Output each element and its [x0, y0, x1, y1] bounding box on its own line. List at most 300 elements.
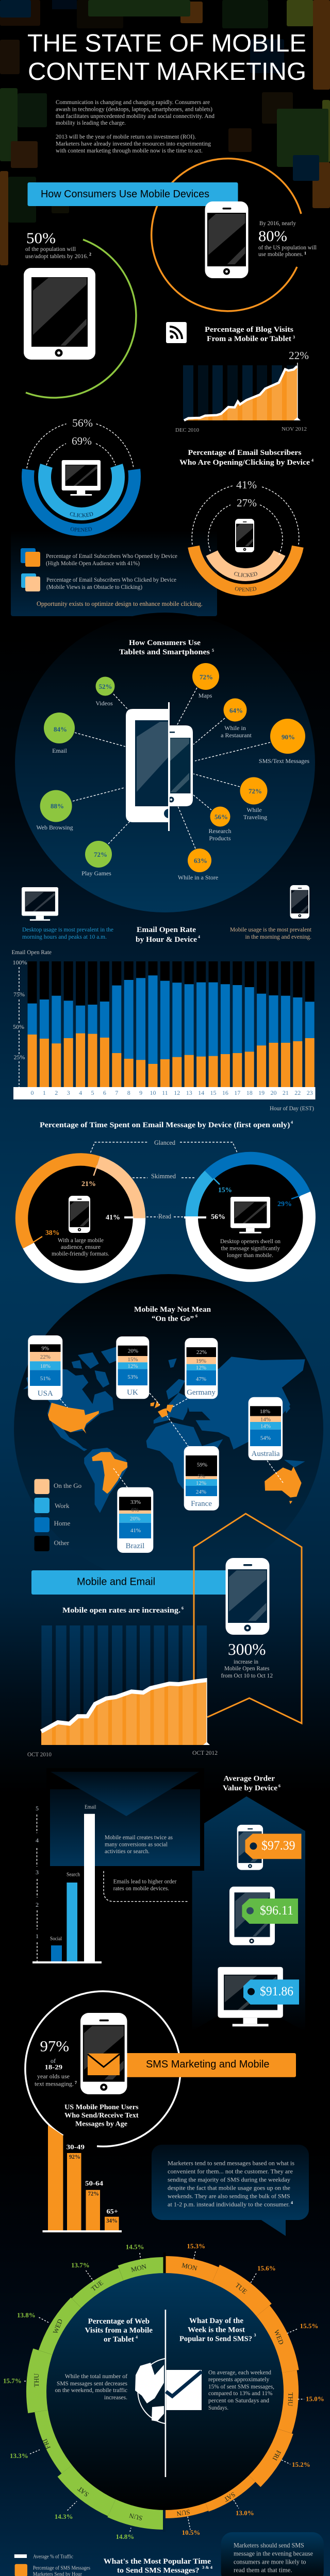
heading: email subscribers: Percentage of Email Subscribers [188, 449, 302, 457]
donut: desktop time spent: 56% [211, 1213, 225, 1221]
area chart: blog visits: DEC 2010 [175, 427, 199, 433]
heading: web visits: Percentage of Web [88, 2317, 150, 2326]
callout: send in the evening: message in the evening because [234, 2550, 313, 2557]
bar chart: text messaging by age: 92% [69, 2153, 80, 2160]
stat: 300 percent: 300% [228, 1640, 266, 1658]
phone card: Australia: 54% [260, 1435, 271, 1442]
bubble: sms [259, 719, 309, 765]
bar chart: email open rate by hour: 14 [198, 1089, 204, 1096]
heading: web visits: or Tablet [104, 2335, 134, 2344]
phone card: Germany: 22% [196, 1349, 207, 1355]
monitor price: $91.86 [260, 1985, 293, 1998]
heading: text by age [64, 2104, 139, 2128]
bubble: email [44, 713, 75, 754]
bar chart: conversions: 1 [36, 1933, 39, 1940]
legend panel: (Mobile Views is an Obstacle to Clicking) [46, 583, 142, 590]
donut: desktop time spent: 15% [218, 1187, 232, 1194]
intro text: Marketers have already invested the resources into experimenting [56, 140, 211, 147]
phone card: Australia [249, 1397, 283, 1460]
green percentages [3, 2243, 144, 2540]
decorative top blocks [0, 0, 330, 265]
callout: higher order rates: Emails lead to higher order [113, 1878, 176, 1885]
bar chart: email open rate by hour: 15 [210, 1089, 217, 1096]
bubble: videos: 52% [99, 683, 112, 690]
chart: desktop opened and clicked arcs: CLICKED [70, 512, 93, 517]
title: CONTENT MARKETING [28, 58, 306, 86]
green percentages: 13.3% [10, 2452, 28, 2460]
bar chart: email open rate by hour: 1 [43, 1089, 46, 1096]
intro text: 2013 will be the year of mobile return on investment (ROI). [56, 133, 196, 140]
green percentages: 14.8% [116, 2533, 134, 2540]
intro text: with content marketing through mobile now is the time to act. [56, 147, 203, 154]
stat: 300 percent: increase in [234, 1658, 258, 1665]
callout: speech bubble: convenient for them... not the customer. They are [168, 2167, 293, 2175]
bubble: while traveling: 72% [249, 787, 262, 795]
chart: desktop opened and clicked arcs: OPENED [70, 527, 92, 532]
bar chart: email open rate by hour: 7 [115, 1089, 118, 1096]
day labels: WED [273, 2329, 286, 2346]
map highlight: Ireland [151, 1402, 155, 1406]
panel: envelope: activities or search. [105, 1848, 150, 1855]
heading: email subscribers [179, 449, 314, 467]
map highlight: Tasmania [289, 1501, 292, 1504]
icon: rss [166, 322, 187, 343]
stat: 300 percent: from Oct 10 to Oct 12 [221, 1672, 273, 1679]
heading: blog visits [205, 326, 295, 343]
orange percentages: 15.6% [257, 2264, 276, 2272]
heading: email open rate: by Hour & Device [136, 936, 197, 944]
bar chart: conversions: Search [67, 1872, 80, 1878]
note: desktop usage: Desktop usage is most prevalent in the [22, 926, 113, 933]
heading: on the go: “On the Go” [152, 1315, 194, 1323]
note: mobile usage [230, 926, 312, 940]
donut: mobile time spent [22, 1159, 139, 1277]
note: weekend sms share: 15% of sent SMS messages, [208, 2383, 274, 2390]
phone card: Australia: 14% [260, 1417, 271, 1423]
note: weekend traffic: SMS messages sent decreases [57, 2380, 127, 2387]
phone card: Germany: 12% [196, 1365, 206, 1371]
day labels [32, 2261, 294, 2522]
bar chart: email open rate by hour: Hour of Day (EST) [270, 1105, 314, 1112]
area chart: blog visits [175, 349, 309, 433]
heading: popular time for sms: What's the Most Popular Time [104, 2557, 211, 2566]
day labels: SUN [176, 2508, 191, 2518]
bar chart: email open rate by hour: 50% [13, 1023, 24, 1030]
heading: mobile open rates: Mobile open rates are increasing. [62, 1606, 180, 1615]
note: weekend sms share: Sundays. [208, 2404, 228, 2411]
heading: day for sms: Popular to Send SMS? [179, 2335, 252, 2343]
map legend: On the Go [54, 1482, 81, 1489]
phone card: UK: 12% [127, 1363, 138, 1369]
callout: send in the evening: Marketers should send SMS [234, 2541, 304, 2549]
orange percentages: 15.0% [306, 2395, 324, 2403]
donut connector labels: Read [158, 1212, 171, 1220]
heading: web visits [85, 2317, 153, 2344]
callout: higher order rates: rates on mobile devices. [113, 1885, 169, 1892]
legend panel: Percentage of Email Subscribers Who Clicked by Device [46, 576, 176, 583]
intro text: awash in technology (desktops, laptops, smartphones, and tablets) [56, 105, 212, 112]
panel: average order value [192, 1797, 305, 2031]
heading: email subscribers: Who Are Opening/Clicking by Device [179, 459, 310, 467]
section banner: how consumers use mobile devices: How Consumers Use Mobile Devices [41, 189, 209, 200]
bar chart: conversions: Social [50, 1936, 62, 1942]
heading: tablets and smartphones: How Consumers Use [129, 639, 201, 647]
panel: envelope [46, 1768, 204, 1871]
bar chart: email open rate by hour: Email Open Rate [11, 948, 52, 956]
icon: phone with envelope [80, 2013, 127, 2094]
heading: tablets and smartphones: 5 [212, 648, 214, 653]
bar chart: email open rate by hour: 11 [162, 1089, 168, 1096]
intro text: mobility is leading the charge. [56, 119, 126, 126]
bubble: research products: Products [209, 835, 231, 842]
donut: desktop time spent: Desktop openers dwell on [220, 1238, 280, 1245]
callout: send in the evening: consumers are more likely to [234, 2557, 306, 2566]
note: weekend traffic: While the total number of [65, 2372, 127, 2380]
bubble: while in a restaurant: While in [224, 724, 246, 732]
stat: 80 percent phones: By 2016, nearly [259, 219, 296, 227]
phone card: Brazil: 33% [130, 1499, 141, 1505]
day labels: SAT [76, 2485, 90, 2499]
phone card: USA: 22% [40, 1354, 51, 1360]
bubble: while traveling [240, 777, 267, 821]
day labels: MON [130, 2262, 147, 2274]
bar chart: email open rate by hour: 12 [174, 1089, 180, 1096]
intro text [56, 98, 214, 154]
icon: half envelope with check [166, 2370, 202, 2410]
heading: blog visits: From a Mobile or Tablet [207, 335, 291, 343]
legend panel [11, 531, 217, 616]
bubble: sms: 90% [282, 733, 295, 741]
orange percentages: 15.5% [300, 2322, 318, 2330]
bar chart: email open rate by hour: 6 [103, 1089, 106, 1096]
map legend: Other [54, 1539, 70, 1547]
donut: mobile time spent: 21% [81, 1180, 96, 1188]
heading: popular time for sms [104, 2557, 212, 2575]
day labels: FRI [41, 2438, 52, 2450]
legend panel: Opportunity exists to optimize design to enhance mobile clicking. [37, 600, 203, 607]
chart: mobile opened and clicked arcs: 41% [236, 479, 257, 491]
heading: blog visits: Percentage of Blog Visits [205, 326, 293, 334]
note: weekend traffic [55, 2372, 127, 2401]
stat: 97 percent: of [51, 2057, 56, 2064]
phone card: UK: 20% [128, 1348, 138, 1354]
tablet price [229, 1887, 298, 1945]
stat: 50 percent tablets [25, 230, 91, 260]
map legend [34, 1479, 81, 1551]
bubble: email: Email [52, 747, 67, 754]
day labels: SAT [223, 2490, 237, 2503]
phone price: $97.39 [261, 1839, 295, 1853]
heading: day for sms: 3 [254, 2333, 256, 2337]
bar chart: text messaging by age: 65+ [106, 2208, 118, 2215]
icon: small phone [290, 885, 309, 919]
world map [23, 1346, 305, 1513]
tablet price: $96.11 [260, 1904, 293, 1918]
phone card: UK: UK [127, 1388, 138, 1397]
heading: email open rate: Email Open Rate [137, 926, 196, 934]
note: mobile usage: in the morning and evening. [245, 933, 311, 940]
map highlight: Germany [166, 1405, 174, 1413]
bubble: web browsing [36, 790, 73, 831]
bubble: play games: Play Games [81, 870, 111, 877]
bar chart: conversions: 5 [36, 1805, 39, 1812]
note: weekend sms share: On average, each weekend [208, 2369, 271, 2376]
day labels: WED [51, 2318, 64, 2335]
stat: 97 percent: 97% [40, 2038, 69, 2055]
legend panel: Percentage of Email Subscribers Who Opened by Device [46, 552, 177, 560]
donut: desktop time spent [184, 1158, 309, 1276]
bar chart: email open rate by hour: 0 [31, 1089, 34, 1096]
map highlight: Australia [265, 1467, 302, 1498]
bar chart: email open rate by hour: 9 [139, 1089, 142, 1096]
bubble: play games: 72% [94, 851, 107, 858]
bar chart: email open rate by hour: 4 [79, 1089, 82, 1096]
panel: black circle behind map [14, 1274, 323, 1583]
icon: monitor [22, 887, 58, 921]
callout: speech bubble [152, 2145, 309, 2236]
day labels: MON [181, 2261, 199, 2272]
orange ring segments [165, 2256, 299, 2518]
phone card: Australia: Australia [252, 1450, 280, 1458]
green percentages: 13.8% [17, 2311, 36, 2319]
bar chart: conversions: 2 [36, 1901, 39, 1908]
phone card: USA: 9% [41, 1346, 49, 1352]
bubble: maps: Maps [199, 692, 212, 699]
day labels: THU [287, 2393, 294, 2406]
bar chart: conversions: Email [85, 1804, 96, 1810]
donut: mobile time spent: mobile-friendly formats. [52, 1250, 109, 1257]
bubble: play games [81, 841, 112, 877]
chart: desktop opened and clicked arcs: 69% [72, 435, 92, 447]
bar chart: text messaging by age: 34% [106, 2217, 118, 2224]
heading: day for sms: What Day of the [189, 2317, 243, 2325]
bubble: sms: SMS/Text Messages [259, 757, 309, 765]
donut: desktop time spent: 29% [277, 1200, 292, 1208]
bar chart: email open rate by hour: 8 [127, 1089, 130, 1096]
map highlight: France [158, 1408, 168, 1418]
bar chart: email open rate by hour [11, 948, 316, 1112]
day labels: SUN [128, 2512, 143, 2522]
stat: 50 percent tablets: 2 [89, 252, 91, 257]
bubble: web browsing: 88% [51, 802, 64, 810]
day labels: FRI [271, 2449, 283, 2462]
section banner: mobile and email [31, 1570, 233, 1595]
bubble: while in a restaurant [221, 699, 252, 739]
phone card: France: 12% [196, 1480, 206, 1486]
bar chart: email open rate by hour: 25% [13, 1054, 25, 1061]
bubble: videos [95, 677, 114, 707]
phone card: France: 59% [197, 1462, 207, 1468]
callout: speech bubble: weekends. They are also sending the bulk of SMS [168, 2192, 290, 2199]
phone card: France: 24% [196, 1489, 206, 1495]
heading: average order value: Average Order [224, 1775, 275, 1783]
note: weekend sms share: compared to 13% and 11% [208, 2389, 273, 2397]
orange percentages: 10.5% [182, 2529, 200, 2536]
green percentages: 14.3% [55, 2513, 73, 2520]
green percentages: 13.7% [71, 2261, 90, 2269]
chart: mobile opened and clicked arcs: OPENED [235, 587, 257, 591]
bar chart: email open rate by hour: 75% [13, 991, 25, 998]
map legend: Work [55, 1502, 70, 1510]
bar chart: text messaging by age: 72% [88, 2190, 99, 2197]
heading: day for sms: Week is the Most [188, 2326, 245, 2334]
bar chart: text messaging by age [42, 2125, 122, 2232]
area chart: open rates: OCT 2012 [192, 1749, 218, 1756]
title [27, 30, 306, 86]
bar chart: conversions: 4 [36, 1837, 39, 1844]
orange ring around phone [152, 159, 301, 311]
legend: sms chart: Percentage of SMS Messages [33, 2565, 90, 2571]
panel: envelope: Mobile email creates twice as [105, 1834, 173, 1841]
phone card: Brazil: 41% [130, 1528, 141, 1534]
note: weekend traffic: on the weekend, mobile traffic [55, 2386, 127, 2394]
bubble: research products: 56% [214, 813, 228, 821]
bubble: research products: Research [209, 827, 231, 835]
phone card: USA: 18% [40, 1363, 51, 1369]
phone card: USA [28, 1335, 62, 1400]
orange percentages: 13.0% [236, 2509, 254, 2517]
heading: email open rate: 4 [198, 935, 200, 939]
stat: 80 percent phones: 80% [258, 228, 287, 245]
bar chart: email open rate by hour: 2 [55, 1089, 58, 1096]
map highlight: Brazil [92, 1452, 127, 1494]
wheel: web visits and sms by day [3, 2242, 324, 2540]
heading: email subscribers: 4 [311, 458, 314, 463]
bubble: while in a store: 63% [194, 857, 207, 865]
donut: mobile time spent: audience, ensure [61, 1243, 101, 1250]
heading: time spent on email: Percentage of Time Spent on Email Message by Device (first open only) [40, 1121, 290, 1129]
bar chart: email open rate by hour: 16 [222, 1089, 228, 1096]
area chart: open rates: OCT 2010 [27, 1751, 52, 1758]
panel: envelope: many conversions as social [105, 1841, 168, 1848]
stat: 300 percent [221, 1640, 273, 1679]
bubble: while traveling: Traveling [243, 814, 267, 821]
stat: 97 percent: text messaging. [35, 2080, 74, 2088]
heading: average order value: 6 [278, 1784, 280, 1788]
day labels: TUE [234, 2281, 249, 2295]
orange outline arrow shape [194, 1514, 302, 1723]
heading: text by age: Messages by Age [75, 2121, 127, 2128]
bar chart: text messaging by age: 50-64 [85, 2179, 104, 2187]
intro text: that facilitates unprecedented mobility and social connectivity. And [56, 112, 214, 120]
icon: half globe [135, 2359, 165, 2424]
green percentages: 14.5% [126, 2243, 144, 2251]
stat: 80 percent phones: 1 [304, 251, 306, 256]
phone card: UK: 53% [127, 1374, 138, 1380]
note: weekend sms share: percent on Saturdays and [208, 2397, 269, 2404]
callout: send in the evening: read them at that time. [234, 2566, 292, 2574]
stat: 97 percent: year olds use [37, 2073, 70, 2080]
note: weekend sms share [208, 2369, 274, 2411]
bubble: while in a store: While in a Store [178, 874, 218, 881]
bar chart: email open rate by hour: 20 [270, 1089, 276, 1096]
chart: desktop opened and clicked arcs [22, 417, 141, 536]
heading: day for sms [179, 2317, 256, 2343]
donut: mobile time spent: 38% [45, 1229, 60, 1237]
phone card: Germany: Germany [187, 1388, 216, 1397]
callout: speech bubble: 4 [291, 2200, 293, 2205]
phone card: Australia: 14% [260, 1423, 271, 1429]
donut: desktop time spent: longer than mobile. [227, 1251, 273, 1259]
icon: tablet [24, 268, 95, 360]
callout: speech bubble: at 1-2 p.m. instead individually to the consumer. [168, 2200, 290, 2208]
donut: desktop time spent: the message significantly [221, 1245, 280, 1252]
bar chart: email open rate by hour: 18 [246, 1089, 253, 1096]
chart: mobile opened and clicked arcs [188, 479, 304, 596]
heading: popular time for sms: 3 & 4 [202, 2565, 212, 2570]
stat: 80 percent phones: of the US population will [258, 244, 317, 251]
orange percentages [182, 2242, 324, 2536]
orange percentages: 15.3% [187, 2242, 205, 2250]
note: desktop usage [22, 926, 113, 940]
phone card: Brazil: Brazil [126, 1542, 144, 1550]
stat: 50 percent tablets: of the population will [25, 245, 76, 252]
phone card: Germany: 47% [196, 1376, 206, 1382]
phone price [237, 1825, 301, 1870]
icon: half tablet half phone [126, 702, 193, 831]
callout: send in the evening [221, 2532, 324, 2576]
phone card: UK: 15% [127, 1357, 138, 1363]
map connector lines [60, 1393, 283, 1487]
bubble: while in a restaurant: 64% [229, 707, 243, 714]
heading: web visits: 4 [136, 2335, 138, 2340]
callout: speech bubble: sending the majority of SMS during the weekday [168, 2176, 290, 2183]
heading: tablets and smartphones: Tablets and Smartphones [119, 648, 210, 656]
heading: time spent on email: 4 [291, 1120, 293, 1125]
heading: on the go: 6 [195, 1314, 197, 1318]
stat: 80 percent phones: use mobile phones. [258, 250, 303, 258]
bubble: email: 84% [54, 725, 67, 733]
phone card: France: 5% [197, 1473, 205, 1480]
note: mobile usage: Mobile usage is the most prevalent [230, 926, 312, 933]
bar chart: email open rate by hour: 17 [234, 1089, 240, 1096]
map legend: Home [54, 1519, 70, 1527]
chart: mobile opened and clicked arcs: CLICKED [234, 572, 257, 577]
phone card: Brazil [117, 1487, 153, 1553]
heading: email open rate [136, 926, 200, 944]
bubble: videos: Videos [95, 700, 113, 707]
bubble: maps [192, 663, 219, 699]
phone card: UK [116, 1336, 149, 1399]
bar chart: email open rate by hour: 13 [186, 1089, 192, 1096]
bar chart: email open rate by hour: 21 [283, 1089, 289, 1096]
bar chart: text messaging by age: 30-49 [67, 2143, 85, 2151]
donut: mobile time spent: With a large mobile [58, 1236, 104, 1244]
map highlight: USA [48, 1403, 99, 1434]
heading: tablets and smartphones [119, 639, 214, 656]
bar chart: conversions: 3 [36, 1869, 39, 1876]
bar chart: email open rate by hour: 10 [150, 1089, 156, 1096]
heading: web visits: Visits from a Mobile [85, 2327, 153, 2335]
bar chart: email open rate by hour: 22 [294, 1089, 301, 1096]
bubble: while in a restaurant: a Restaurant [221, 732, 252, 739]
area chart stripes [41, 1625, 207, 1745]
stat: 300 percent: Mobile Open Rates [224, 1665, 270, 1672]
green ring segments [26, 2257, 165, 2530]
monitor price [218, 1967, 299, 2026]
stat: 97 percent: 7 [75, 2080, 77, 2085]
stat: 97 percent [35, 2038, 77, 2088]
bubble: while traveling: While [246, 806, 262, 814]
section banner: how consumers use mobile devices [28, 182, 238, 206]
bar chart: email open rate by hour: 19 [258, 1089, 265, 1096]
area chart: open rates [27, 1678, 218, 1756]
bubble: research products [209, 807, 231, 842]
note: weekend traffic: increases. [104, 2394, 127, 2401]
bar chart: email open rate by hour: 23 [307, 1089, 313, 1096]
bubble: maps: 72% [200, 673, 213, 681]
stat: 80 percent phones [258, 219, 317, 258]
